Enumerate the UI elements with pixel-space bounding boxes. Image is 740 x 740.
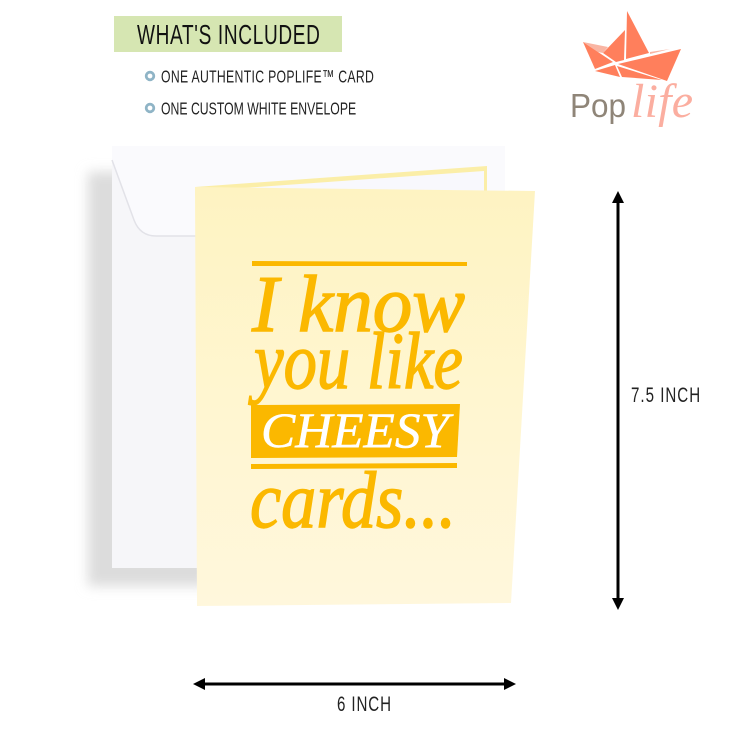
logo: poplife: Pop: [570, 87, 626, 124]
cheesy banner: CHEESY: [261, 402, 454, 458]
logo: poplife: [570, 11, 693, 128]
text: you like: you like: [248, 318, 463, 406]
heading: what's included: WHAT'S INCLUDED: [137, 19, 320, 51]
card front: [195, 187, 535, 606]
width label: 6 INCH: [337, 691, 391, 716]
text: I know: I know: [251, 261, 465, 349]
top rule: [252, 261, 467, 266]
envelope with shadow: [88, 146, 505, 586]
lower rule: [251, 463, 457, 469]
included items list: [146, 67, 374, 119]
item: one card: ONE AUTHENTIC POPLIFE™ CARD: [161, 67, 374, 87]
card back panel: [195, 166, 487, 195]
item: one envelope: ONE CUSTOM WHITE ENVELOPE: [161, 99, 356, 119]
height arrow: [612, 191, 624, 610]
width arrow: [193, 678, 516, 690]
logo: poplife: life: [631, 75, 693, 128]
height label: 7.5 INCH: [631, 382, 700, 407]
text: cards: cards...: [250, 457, 456, 545]
